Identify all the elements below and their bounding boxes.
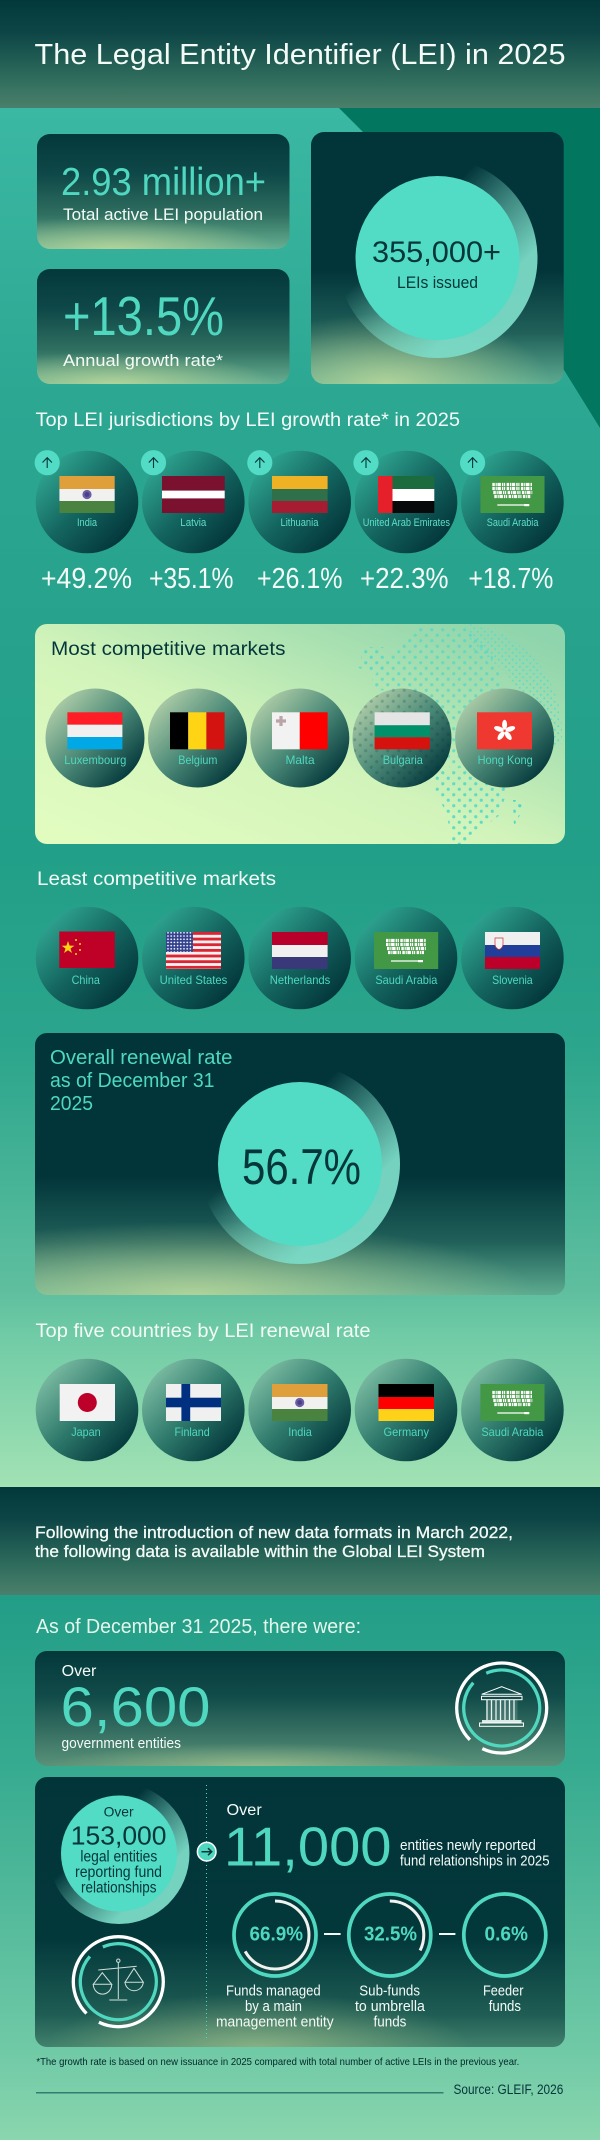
ring: funds managed 66.9%: management entity [216, 2014, 334, 2031]
market: Finland: Finland [174, 1425, 210, 1439]
heading: top jurisdictions by growth: Top LEI jurisdictions by LEI growth rate* in 2025 [36, 409, 460, 431]
banner: new data formats: Following the introduction of new data formats in March 2022, [35, 1523, 513, 1542]
market: Latvia growth: Latvia [180, 517, 207, 529]
market: Netherlands: Netherlands [270, 973, 330, 987]
fund relationships circle: legal entities [80, 1849, 158, 1866]
dark green angular shape [339, 108, 600, 428]
title banner [0, 0, 600, 108]
newly reported fund relationships: fund relationships in 2025 [400, 1853, 550, 1870]
market: Malta: Malta [286, 753, 315, 767]
market: Japan: Japan [71, 1425, 101, 1439]
market: Bulgaria: Bulgaria [383, 753, 423, 767]
page background: upper section [0, 108, 600, 1487]
connector dash [324, 1933, 341, 1935]
newly reported fund relationships [224, 1802, 550, 1878]
market: Lithuania growth [247, 450, 351, 595]
fund relationships circle: relationships [81, 1880, 157, 1897]
heading: as of December 31: As of December 31 2025, there were: [36, 1616, 361, 1638]
panel: overall renewal rate: 2025 [50, 1093, 93, 1115]
panel: LEIs issued: LEIs issued [397, 273, 478, 292]
panel: total active LEI population [37, 134, 290, 249]
ring: feeder funds 0.6%: Feeder [483, 1983, 524, 2000]
panel: fund relationships [35, 1777, 565, 2047]
market: United States [142, 907, 245, 1009]
market: United Arab Emirates growth: United Arab Emirates [363, 517, 450, 529]
market: Saudi Arabia growth [460, 450, 564, 595]
panel: government entities [35, 1644, 565, 1772]
market: Lithuania growth: +26.1% [257, 563, 342, 595]
panel: government entities: Over [62, 1663, 96, 1680]
market: Japan [36, 1359, 138, 1461]
heading: least competitive markets: Least competitive markets [37, 868, 276, 890]
heading: most competitive markets: Most competitive markets [51, 638, 286, 660]
market: Latvia growth [141, 450, 245, 595]
ring: sub-funds 32.5%: 32.5% [364, 1924, 417, 1946]
market: Saudi Arabia growth: +18.7% [468, 563, 553, 595]
market: Belgium: Belgium [178, 753, 217, 767]
panel: overall renewal rate [35, 1033, 565, 1295]
newly reported fund relationships: Over [226, 1802, 262, 1819]
market: Belgium [148, 688, 247, 788]
market: Luxembourg [46, 688, 144, 788]
source line [36, 2092, 444, 2094]
market: United States: United States [160, 973, 227, 987]
ring: sub-funds 32.5%: Sub-funds [359, 1983, 420, 2000]
market: Slovenia [461, 907, 564, 1009]
market: Bulgaria [352, 688, 452, 788]
panel: annual growth rate: +13.5% [63, 285, 224, 347]
market: Saudi Arabia growth: Saudi Arabia [487, 517, 539, 529]
panel: government entities: government entities [62, 1736, 181, 1752]
newly reported fund relationships: entities newly reported [400, 1837, 536, 1854]
fund relationships circle [48, 1783, 190, 1924]
source: Source: GLEIF, 2026 [454, 2082, 563, 2097]
ring: funds managed 66.9%: by a main [245, 1998, 302, 2015]
market: Saudi Arabia least competitive: Saudi Arabia [375, 973, 438, 987]
ring: feeder funds 0.6%: 0.6% [484, 1924, 528, 1946]
market: Luxembourg: Luxembourg [64, 753, 126, 767]
ring: funds managed 66.9%: 66.9% [250, 1924, 303, 1946]
panel: government entities: 6,600 [60, 1675, 210, 1738]
market: Germany [355, 1359, 457, 1461]
market: Saudi Arabia renewal: Saudi Arabia [481, 1425, 544, 1439]
panel: most competitive markets [35, 624, 565, 845]
market: China: China [72, 973, 100, 987]
fund relationships circle: Over [104, 1804, 134, 1820]
icon: scales [55, 1918, 182, 2045]
ring: sub-funds 32.5% [349, 1894, 431, 2031]
icon: arrow [197, 1842, 216, 1861]
banner: new data formats [0, 1487, 600, 1595]
panel: overall renewal rate: 56.7% [242, 1139, 361, 1195]
heading: top five by renewal rate: Top five countries by LEI renewal rate [36, 1320, 370, 1342]
fund relationships circle: reporting fund [75, 1864, 162, 1881]
page background: lower section [0, 1595, 600, 2140]
panel: total active LEI population: 2.93 million+ [61, 161, 266, 204]
icon: government building [438, 1644, 565, 1772]
market: Saudi Arabia renewal [461, 1359, 564, 1461]
panel: LEIs issued [311, 132, 564, 384]
market: Saudi Arabia least competitive [355, 907, 457, 1009]
panel: LEIs issued: 355,000+ [372, 236, 501, 269]
dotted divider [206, 1785, 208, 2039]
panel: overall renewal rate: as of December 31 [50, 1070, 214, 1092]
market: Hong Kong: Hong Kong [478, 753, 533, 767]
market: Finland [142, 1359, 245, 1461]
banner: new data formats: the following data is available within the Global LEI System [35, 1542, 485, 1561]
market: India renewal [248, 1359, 351, 1461]
ring: funds managed 66.9%: Funds managed [226, 1983, 321, 2000]
market: India renewal: India [288, 1425, 312, 1439]
footnote: *The growth rate is based on new issuance in 2025 compared with total number of active LEIs in the previous year. [36, 2056, 519, 2068]
newly reported fund relationships: 11,000 [224, 1816, 392, 1878]
panel: annual growth rate: Annual growth rate* [63, 351, 223, 370]
market: India growth: +49.2% [41, 563, 132, 595]
market: Malta [250, 688, 349, 788]
market: Slovenia: Slovenia [492, 973, 533, 987]
ring: feeder funds 0.6%: funds [489, 1998, 521, 2015]
panel: annual growth rate [37, 269, 290, 384]
market: Lithuania growth: Lithuania [280, 517, 319, 529]
ring: funds managed 66.9% [216, 1894, 334, 2031]
ring: sub-funds 32.5%: to umbrella [355, 1998, 425, 2015]
market: India growth: India [77, 517, 98, 529]
market: United Arab Emirates growth [353, 450, 457, 595]
market: Germany: Germany [384, 1425, 429, 1439]
panel: total active LEI population: Total active LEI population [63, 205, 263, 224]
connector dash [439, 1933, 455, 1935]
market: Latvia growth: +35.1% [149, 563, 233, 595]
market: Netherlands [248, 907, 351, 1009]
title: The Legal Entity Identifier (LEI) in 2025 [34, 39, 566, 71]
market: Hong Kong [455, 688, 554, 788]
fund relationships circle: 153,000 [71, 1820, 166, 1850]
market: China [36, 907, 138, 1009]
ring: sub-funds 32.5%: funds [374, 2014, 406, 2031]
ring: feeder funds 0.6% [464, 1894, 546, 2015]
panel: overall renewal rate: Overall renewal rate [50, 1047, 232, 1069]
market: India growth [35, 450, 138, 595]
market: United Arab Emirates growth: +22.3% [360, 563, 448, 595]
